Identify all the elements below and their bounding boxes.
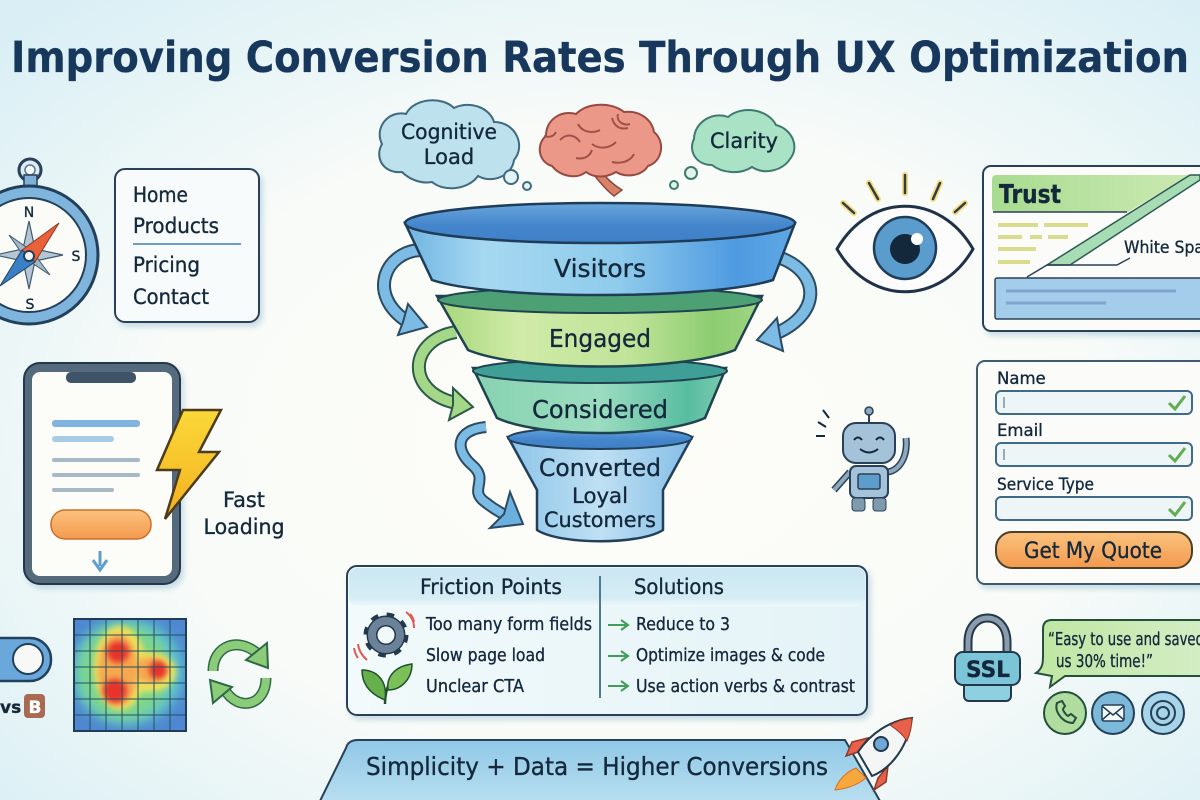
quote form: Service Type [997,475,1094,494]
label: fast loading [204,488,284,539]
friction list: Unclear CTA [426,676,525,697]
navigation menu card: Home [133,183,188,207]
funnel stage: converted: Converted [539,454,661,482]
thought cloud: cognitive load: Cognitive [401,120,497,144]
icon: lightning bolt [157,410,221,519]
funnel stage: engaged [437,287,762,366]
icon: compass: N [24,205,34,221]
thought cloud: cognitive load: Load [424,145,474,169]
quote form: Name [997,369,1046,388]
column headers: Solutions [634,575,724,599]
icon: sprout [362,664,412,704]
thought cloud: clarity: Clarity [710,129,778,153]
funnel stage: visitors [405,203,795,295]
funnel stage: considered: Considered [532,395,668,424]
funnel stage: converted [508,427,692,541]
arrow: squiggly blue [461,427,523,528]
banner: simplicity + data [320,740,880,800]
funnel stage: visitors: Visitors [554,254,646,283]
arrow: green [419,332,473,420]
icon: mobile phone [24,363,180,584]
icon: ssl padlock: SSL [966,658,1010,683]
funnel stage: engaged: Engaged [549,324,651,353]
icon: refresh arrows [210,643,268,703]
icon: compass: S [72,249,81,265]
icon: rocket [835,718,912,790]
funnel stage: converted: Customers [544,508,656,532]
solutions list: Use action verbs & contrast [636,676,855,697]
friction and solutions table [347,566,867,715]
icon: ssl padlock [955,618,1020,701]
navigation menu card: Contact [133,285,209,309]
icon: mail contact [1092,692,1134,734]
icon: compass: S [26,297,35,313]
thought cloud: cognitive load [379,100,531,190]
funnel [405,203,795,541]
arrow: left blue [384,250,427,335]
icon: eye [837,175,973,292]
A/B test toggle [0,638,51,718]
quote form: Email [997,421,1043,440]
label: fast loading: Loading [204,515,284,539]
friction list: Slow page load [426,645,545,666]
friction list: Too many form fields [425,614,592,635]
heatmap [72,619,186,731]
funnel stage: considered [473,359,727,433]
friction list [425,614,592,697]
thought cloud: clarity [670,110,794,189]
column headers [420,575,724,599]
solutions list: Optimize images & code [636,645,825,666]
A/B test toggle: B [29,698,41,718]
solutions list: Reduce to 3 [636,614,730,635]
quote form [977,361,1200,584]
column headers: Friction Points [420,575,562,599]
icon: brain [540,105,661,196]
icon: compass [0,159,98,324]
button: get my quote: Get My Quote [1024,539,1162,564]
testimonial speech bubble: us 30% time!” [1056,652,1153,672]
navigation menu card: Pricing [133,253,200,277]
trust web page mock: Trust [999,180,1061,210]
solutions list [608,614,855,697]
funnel stage: converted: Loyal [572,484,628,508]
button: get my quote [996,532,1192,568]
A/B test toggle: vs [0,698,21,718]
navigation menu card: Products [133,214,219,238]
label: fast loading: Fast [223,488,265,512]
icon: phone contact [1044,692,1086,734]
banner: simplicity + data: Simplicity + Data = Higher Conversions [366,752,828,781]
icon: robot [816,407,906,511]
arrow: right blue [757,257,810,351]
navigation menu card [115,169,259,322]
testimonial speech bubble [1036,620,1200,687]
icon: gear [354,612,414,660]
trust web page mock [983,166,1200,331]
icon: target contact [1142,692,1184,734]
